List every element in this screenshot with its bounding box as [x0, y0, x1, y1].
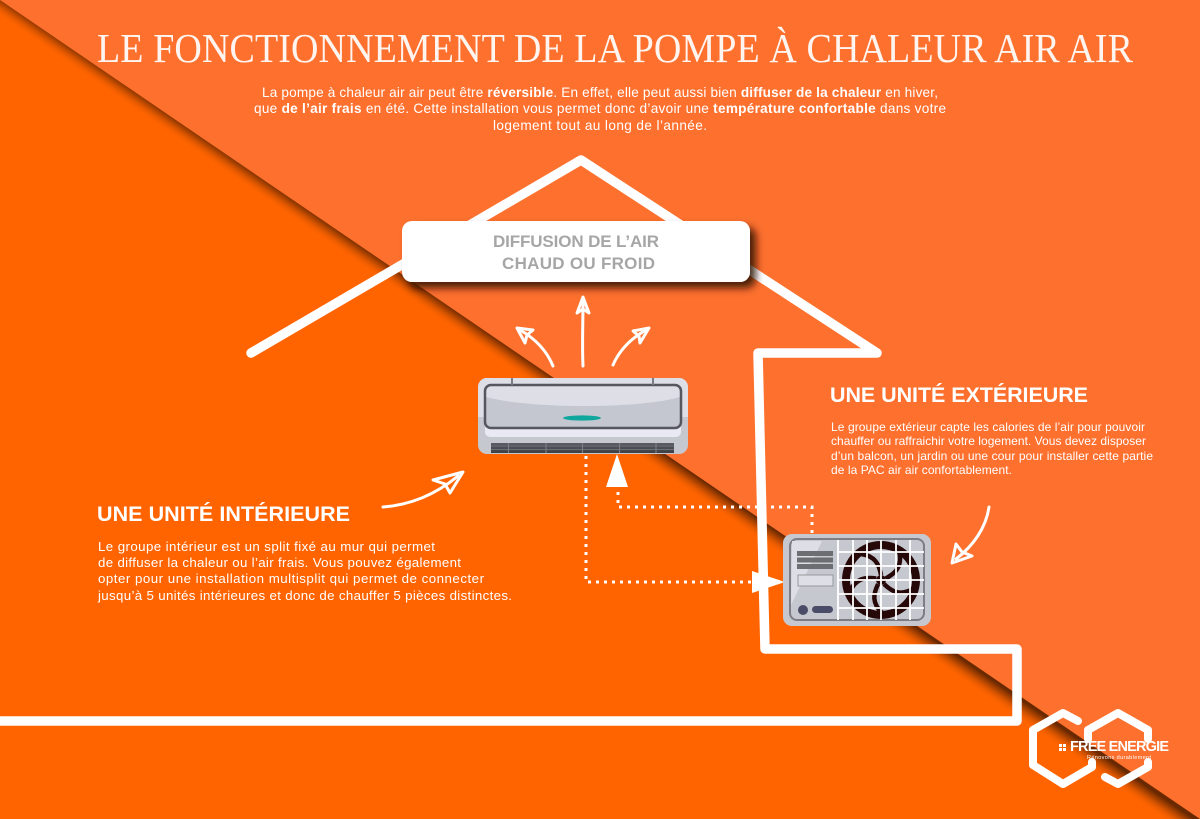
callout: diffusion de l'air: DIFFUSION DE L’AIR	[493, 232, 659, 251]
text: unité extérieure: d’un balcon, un jardin ou une cour pour installer cette partie	[831, 449, 1153, 463]
intro text	[254, 85, 946, 133]
intro text: que de l’air frais en été. Cette installation vous permet donc d’avoir une température confortable dans votre	[254, 101, 946, 116]
text: unité intérieure: opter pour une installation multisplit qui permet de connecter	[98, 571, 485, 586]
text: unité intérieure	[97, 539, 512, 603]
icon: air flow arrows	[517, 297, 649, 366]
logo: Free Energie: Rénovons durablement	[1087, 755, 1151, 761]
dotted line: pipe from outdoor unit	[618, 488, 812, 533]
text: unité intérieure: de diffuser la chaleur ou l’air frais. Vous pouvez également	[98, 555, 461, 570]
heading: unité intérieure: UNE UNITÉ INTÉRIEURE	[97, 501, 350, 526]
arrow: right to outdoor unit	[752, 571, 785, 593]
text: unité intérieure: jusqu’à 5 unités intérieures et donc de chauffer 5 pièces distinctes.	[97, 588, 512, 603]
arrow: to outdoor unit	[952, 507, 989, 563]
icon: indoor split unit	[478, 378, 688, 454]
text: unité extérieure: Le groupe extérieur capte les calories de l’air pour pouvoir	[831, 420, 1145, 434]
intro text: La pompe à chaleur air air peut être réversible. En effet, elle peut aussi bien diffuser de la chaleur en hiver,	[262, 85, 938, 100]
arrow: up to indoor unit	[606, 454, 628, 487]
callout: diffusion de l'air: CHAUD OU FROID	[502, 254, 655, 273]
intro text: logement tout au long de l’année.	[493, 118, 707, 133]
arrow: to indoor unit	[383, 472, 463, 507]
house outline	[0, 160, 1017, 721]
text: unité extérieure: de la PAC air air confortablement.	[831, 463, 1012, 477]
heading: unité extérieure: UNE UNITÉ EXTÉRIEURE	[830, 382, 1088, 407]
dotted line: pipe to indoor unit	[586, 456, 757, 582]
title: LE FONCTIONNEMENT DE LA POMPE À CHALEUR AIR AIR	[97, 26, 1134, 71]
logo: Free Energie: FREE ENERGIE	[1070, 739, 1169, 755]
text: unité extérieure: chauffer ou raffraichir votre logement. Vous devez disposer	[831, 434, 1146, 448]
text: unité extérieure	[831, 420, 1153, 477]
text: unité intérieure: Le groupe intérieur est un split fixé au mur qui permet	[98, 539, 435, 554]
logo: Free Energie	[1033, 713, 1169, 784]
icon: outdoor unit	[783, 534, 931, 626]
callout: diffusion de l'air	[402, 221, 750, 282]
